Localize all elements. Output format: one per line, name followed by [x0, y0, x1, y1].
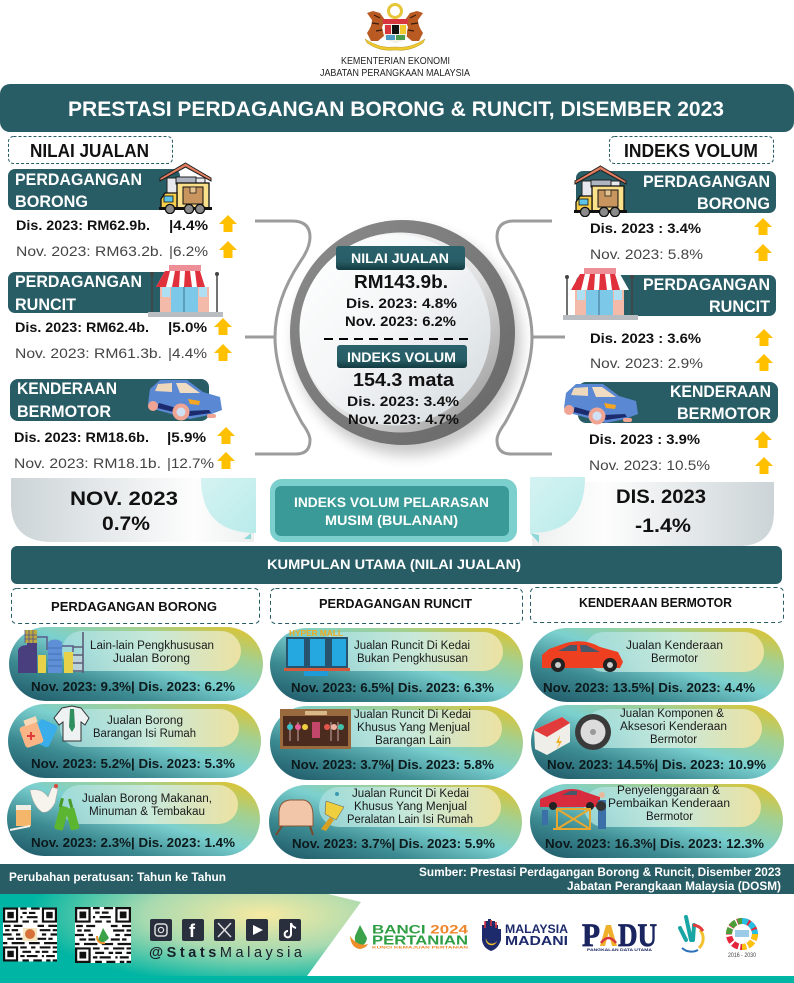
panel: indeks volum kenderaan bermotor — [564, 382, 778, 474]
QR code: banci pertanian — [75, 907, 131, 963]
panel: nilai jualan perdagangan runcit: PERDAGANGAN — [15, 273, 142, 291]
header: ministry emblem and agency name — [320, 4, 470, 79]
logo: PADU — [582, 918, 657, 954]
icon: battery and tyre — [534, 714, 611, 755]
labels: Jualan Runcit Di Kedai — [354, 640, 470, 652]
pill: jualan runcit khusus barangan lain — [270, 706, 523, 780]
tag: indeks volum — [337, 345, 467, 368]
tag: indeks volum: INDEKS VOLUM — [347, 349, 456, 365]
labels: Jualan Runcit Di Kedai — [352, 788, 469, 800]
icon: chicken, bottles and cigarettes — [10, 784, 80, 831]
value: total sales: RM143.9b. — [354, 272, 448, 292]
social handle: @StatsMalaysia — [149, 945, 303, 961]
panel: nilai jualan kenderaan bermotor: BERMOTOR — [17, 403, 111, 421]
callout: december seasonally adjusted: DIS. 2023 — [616, 486, 706, 508]
logo: sustainable development goals wheel — [728, 921, 757, 959]
labels — [354, 709, 471, 747]
labels: Jualan Komponen & — [620, 708, 724, 720]
values: Nov. 2023: 16.3%| Dis. 2023: 12.3% — [545, 837, 764, 851]
icon: hyper mall: HYPER MALL — [289, 629, 343, 638]
icon: red car — [542, 641, 623, 672]
labels: Khusus Yang Menjual — [357, 722, 470, 734]
labels: Barangan Lain — [375, 735, 451, 747]
icon: Malaysian coat of arms — [365, 4, 425, 50]
column heading: kenderaan bermotor — [530, 588, 784, 622]
logo: banci pertanian 2024 — [350, 924, 469, 950]
labels: Bermotor — [646, 811, 693, 823]
labels — [608, 785, 730, 823]
agency name: JABATAN PERANGKAAN MALAYSIA — [320, 68, 470, 79]
labels: Khusus Yang Menjual — [354, 801, 467, 813]
logo: malaysia madani: MADANI — [505, 933, 568, 948]
icon: x — [214, 919, 235, 941]
panel: indeks volum perdagangan borong: PERDAGANGAN — [643, 173, 770, 191]
icon: facebook: f — [189, 921, 196, 941]
panel: nilai jualan perdagangan runcit: |5.0% — [168, 319, 208, 335]
panel: indeks volum perdagangan runcit: Nov. 2023: 2.9% — [590, 355, 703, 371]
panel: indeks volum perdagangan borong: Dis. 2023 : 3.4% — [590, 220, 702, 236]
labels: Aksesori Kenderaan — [620, 721, 727, 733]
tag: nilai jualan: NILAI JUALAN — [351, 250, 449, 266]
logo: malaysia madani: MALAYSIA — [505, 922, 568, 936]
labels: Barangan Isi Rumah — [93, 728, 196, 740]
icon: clothing boutique — [280, 709, 351, 749]
callout: seasonally adjusted label — [270, 479, 517, 542]
footer bar: notes and source — [0, 864, 794, 894]
panel: indeks volum perdagangan borong — [574, 166, 776, 262]
pill: jualan runcit khusus peralatan isi rumah — [269, 785, 522, 859]
panel: indeks volum kenderaan bermotor: KENDERAAN — [670, 383, 771, 401]
labels: Pembaikan Kenderaan — [608, 798, 730, 810]
panel: nilai jualan kenderaan bermotor: KENDERAAN — [17, 380, 117, 398]
footer band: teal background — [0, 894, 794, 983]
callout: seasonally adjusted label: MUSIM (BULANAN) — [325, 512, 458, 528]
icon: armchair and paint brush — [276, 792, 344, 835]
panel: nilai jualan perdagangan runcit: RUNCIT — [15, 296, 76, 314]
icon: hyper mall — [284, 629, 350, 676]
labels: Peralatan Lain Isi Rumah — [347, 814, 473, 826]
panel: nilai jualan perdagangan runcit — [8, 265, 232, 361]
pill: jualan borong barangan isi rumah — [8, 704, 261, 778]
pill: jualan komponen dan aksesori kenderaan — [531, 705, 784, 779]
values: Nov. 2023: 9.3%| Dis. 2023: 6.2% — [31, 680, 235, 694]
panel: nilai jualan perdagangan borong: PERDAGANGAN — [15, 171, 142, 189]
column heading: perdagangan runcit: PERDAGANGAN RUNCIT — [319, 597, 472, 611]
values: Nov. 2023: 5.2%| Dis. 2023: 5.3% — [31, 757, 235, 771]
pill: penyelenggaraan dan pembaikan kenderaan — [530, 784, 783, 858]
panel: nilai jualan perdagangan borong: Dis. 2023: RM62.9b. — [16, 217, 150, 233]
agency name — [320, 56, 470, 79]
icon: medicine and shirt — [19, 706, 89, 748]
callout: december seasonally adjusted — [530, 477, 774, 546]
pill: jualan borong makanan minuman tembakau — [7, 782, 260, 856]
callout: seasonally adjusted label: INDEKS VOLUM PELARASAN — [294, 494, 489, 510]
logo: banci pertanian 2024: BANCI 2024 — [372, 924, 469, 936]
value: volume index: 154.3 mata — [353, 370, 455, 390]
heading: indeks volum — [610, 136, 774, 164]
callout: november seasonally adjusted — [11, 478, 256, 542]
panel: indeks volum perdagangan borong: Nov. 2023: 5.8% — [590, 246, 703, 262]
section heading: kumpulan utama — [11, 546, 782, 584]
panel: central circle summary — [290, 220, 521, 455]
labels: Bukan Pengkhususan — [357, 653, 468, 665]
panel: nilai jualan kenderaan bermotor: Nov. 2023: RM18.1b. — [14, 455, 161, 471]
pill: jualan runcit bukan pengkhususan — [270, 628, 523, 702]
section heading: kumpulan utama: KUMPULAN UTAMA (NILAI JUALAN) — [267, 556, 521, 572]
panel: nilai jualan perdagangan runcit: Nov. 2023: RM61.3b. — [15, 345, 162, 361]
values: Nov. 2023: 6.5%| Dis. 2023: 6.3% — [291, 681, 494, 695]
values: Nov. 2023: 3.7%| Dis. 2023: 5.8% — [291, 758, 494, 772]
labels — [90, 640, 214, 665]
footer bar: notes and source: Perubahan peratusan: Tahun ke Tahun — [9, 872, 226, 884]
panel: nilai jualan perdagangan borong: |4.4% — [169, 217, 209, 233]
panel: nilai jualan perdagangan borong: BORONG — [15, 193, 88, 211]
panel: nilai jualan kenderaan bermotor: |5.9% — [167, 429, 207, 445]
labels: Penyelenggaraan & — [617, 785, 720, 797]
column heading: perdagangan borong — [12, 588, 260, 624]
panel: nilai jualan perdagangan borong: Nov. 2023: RM63.2b. — [16, 243, 163, 259]
panel: nilai jualan perdagangan borong: |6.2% — [169, 243, 208, 259]
labels: Minuman & Tembakau — [89, 806, 205, 818]
labels: Bermotor — [650, 734, 697, 746]
sales growth rows: Nov. 2023: 6.2% — [345, 314, 456, 329]
labels — [354, 640, 470, 665]
icon: factory — [18, 630, 83, 673]
panel: indeks volum perdagangan runcit: Dis. 2023 : 3.6% — [590, 330, 702, 346]
tag: nilai jualan — [336, 246, 465, 270]
labels: Jualan Borong — [113, 653, 190, 665]
labels — [82, 793, 212, 818]
logo: hand and arc — [680, 917, 703, 952]
callout: november seasonally adjusted: NOV. 2023 — [70, 488, 178, 510]
title banner: PRESTASI PERDAGANGAN BORONG & RUNCIT, DISEMBER 2023 — [68, 97, 724, 121]
heading: nilai jualan: NILAI JUALAN — [30, 141, 149, 161]
social media icons — [150, 919, 301, 941]
volume growth rows: Dis. 2023: 3.4% — [347, 394, 459, 409]
logo: banci pertanian 2024: KUNCI KEMAJUAN PERTANIAN — [372, 944, 468, 950]
panel: indeks volum perdagangan borong: BORONG — [697, 195, 770, 213]
pill: lain-lain pengkhususan jualan borong — [9, 627, 263, 701]
labels — [626, 640, 723, 665]
labels — [620, 708, 727, 746]
icon: tiktok — [279, 919, 301, 941]
panel: nilai jualan perdagangan borong — [8, 163, 237, 259]
labels: Jualan Kenderaan — [626, 640, 723, 652]
title banner — [0, 84, 794, 132]
labels: Bermotor — [651, 653, 698, 665]
panel: indeks volum perdagangan runcit: PERDAGANGAN — [643, 276, 770, 294]
panel: nilai jualan perdagangan runcit: Dis. 2023: RM62.4b. — [15, 319, 149, 335]
panel: indeks volum kenderaan bermotor: Dis. 2023 : 3.9% — [589, 431, 701, 447]
connector: right bracket — [497, 221, 565, 454]
pill: jualan kenderaan bermotor — [530, 628, 784, 702]
panel: indeks volum kenderaan bermotor: Nov. 2023: 10.5% — [589, 457, 710, 473]
heading: indeks volum: INDEKS VOLUM — [624, 141, 758, 161]
values: Nov. 2023: 13.5%| Dis. 2023: 4.4% — [543, 681, 755, 695]
labels: Jualan Borong — [107, 715, 183, 727]
volume growth rows — [347, 394, 459, 427]
icon: car on lift with mechanics — [540, 789, 606, 829]
logo: PADU: P — [582, 918, 600, 954]
logo: banci pertanian 2024: PERTANIAN — [372, 934, 468, 948]
QR code: ministry — [3, 908, 57, 962]
labels — [93, 715, 196, 740]
sales growth rows: Dis. 2023: 4.8% — [346, 296, 457, 311]
panel: nilai jualan perdagangan runcit: |4.4% — [168, 345, 207, 361]
callout: november seasonally adjusted: 0.7% — [102, 513, 150, 535]
panel: indeks volum kenderaan bermotor: BERMOTOR — [677, 405, 771, 423]
values: Nov. 2023: 2.3%| Dis. 2023: 1.4% — [31, 836, 235, 850]
panel: indeks volum perdagangan runcit: RUNCIT — [709, 298, 770, 316]
labels: Lain-lain Pengkhususan — [90, 640, 214, 652]
panel: nilai jualan kenderaan bermotor: |12.7% — [167, 455, 214, 471]
panel: nilai jualan kenderaan bermotor — [10, 379, 235, 471]
volume growth rows: Nov. 2023: 4.7% — [348, 412, 459, 427]
column heading: perdagangan borong: PERDAGANGAN BORONG — [51, 600, 217, 614]
logo: malaysia madani — [482, 919, 568, 951]
icon: instagram — [150, 919, 172, 941]
connector: left bracket — [245, 221, 310, 454]
logo: PADU: PANGKALAN DATA UTAMA — [587, 947, 652, 952]
heading: nilai jualan — [8, 136, 172, 164]
footer bar: notes and source: Jabatan Perangkaan Malaysia (DOSM) — [567, 881, 781, 893]
labels: Jualan Runcit Di Kedai — [354, 709, 471, 721]
column heading: kenderaan bermotor: KENDERAAN BERMOTOR — [579, 596, 732, 610]
sales growth rows — [345, 296, 457, 329]
callout: december seasonally adjusted: -1.4% — [635, 515, 691, 537]
footer bar: notes and source: Sumber: Prestasi Perdagangan Borong & Runcit, Disember 2023 — [419, 867, 781, 879]
values: Nov. 2023: 14.5%| Dis. 2023: 10.9% — [547, 758, 766, 772]
logo: PADU: DU — [618, 918, 657, 954]
logo: sustainable development goals wheel: 2016 - 2030 — [728, 953, 757, 959]
panel: nilai jualan kenderaan bermotor: Dis. 2023: RM18.6b. — [14, 429, 149, 445]
icon: facebook — [182, 919, 204, 941]
column heading: perdagangan runcit — [270, 588, 522, 624]
values: Nov. 2023: 3.7%| Dis. 2023: 5.9% — [292, 837, 495, 851]
agency name: KEMENTERIAN EKONOMI — [341, 56, 450, 67]
icon: youtube — [246, 919, 268, 941]
labels — [347, 788, 473, 826]
panel: indeks volum perdagangan runcit — [563, 268, 776, 371]
labels: Jualan Borong Makanan, — [82, 793, 212, 805]
